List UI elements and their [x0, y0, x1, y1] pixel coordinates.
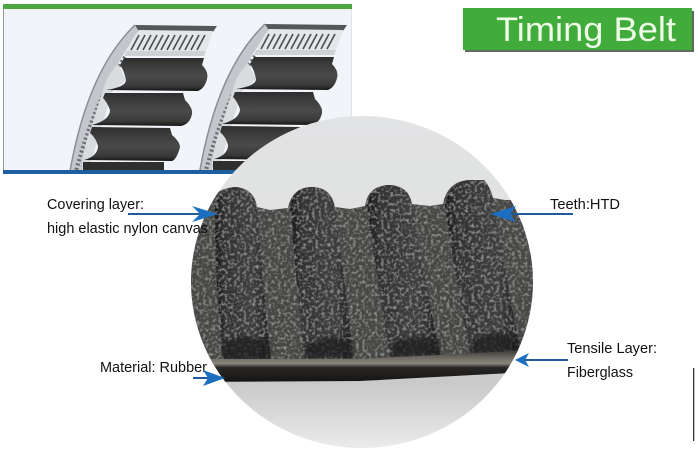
- icon: belt cross-section left: [70, 25, 217, 171]
- backing strip with tensile layer: [210, 350, 518, 382]
- label: tensile layer: Tensile Layer:: [567, 341, 657, 357]
- label: teeth: Teeth:HTD: [550, 197, 620, 213]
- belt body with teeth: [190, 180, 540, 365]
- title: Timing Belt: Timing Belt: [496, 11, 677, 49]
- arrow: tensile layer: [515, 353, 568, 367]
- arrow: teeth: [490, 206, 573, 222]
- label: covering layer: Covering layer:: [47, 197, 144, 213]
- arrow: material: [193, 370, 225, 386]
- photo: close-up of belt in circle: [190, 115, 540, 450]
- label: tensile layer: Fiberglass: [567, 365, 633, 381]
- vertical black rule: [693, 368, 694, 441]
- tooth base shadows: [223, 332, 520, 360]
- label: covering layer: [47, 197, 208, 237]
- label: material: Material: Rubber: [100, 360, 207, 376]
- tooth ribs: [215, 180, 520, 360]
- label: covering layer: high elastic nylon canvas: [47, 221, 208, 237]
- icon: belt cross-section right: [200, 24, 347, 170]
- title: Timing Belt: [463, 8, 694, 52]
- arrow: covering layer: [128, 206, 218, 222]
- panel: belt profile diagram: [3, 4, 352, 174]
- label: tensile layer: [567, 341, 657, 381]
